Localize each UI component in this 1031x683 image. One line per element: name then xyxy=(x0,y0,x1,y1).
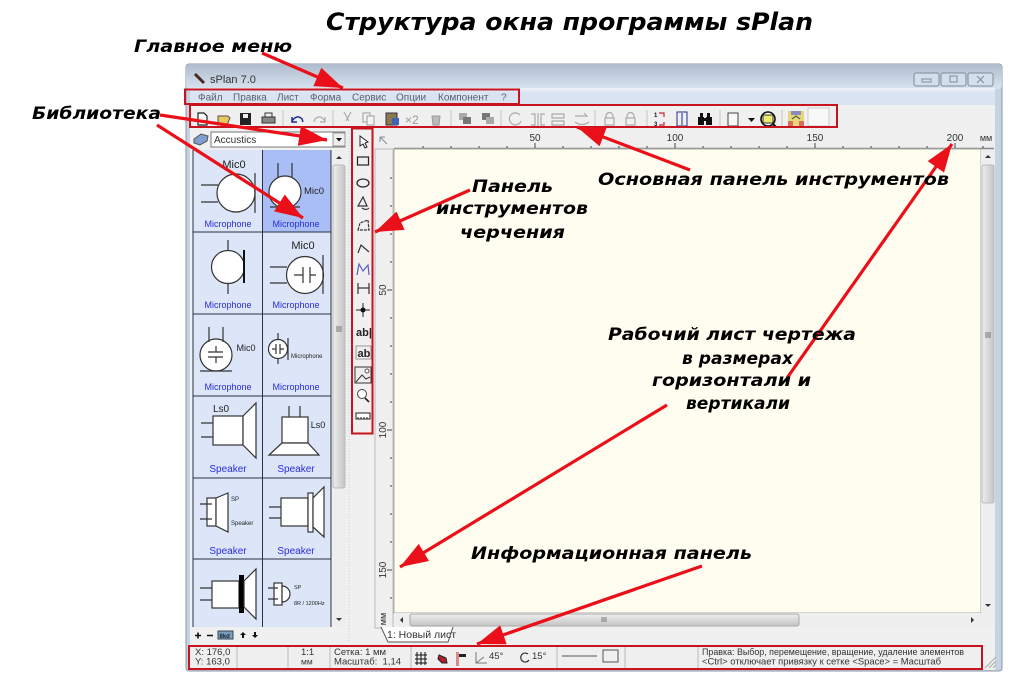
status bar: <Ctrl> отключает привязку к сетке <Space> = Масштаб xyxy=(702,656,942,668)
label: worksheet xyxy=(608,325,856,414)
status bar: Правка: Выбор, перемещение, вращение, удаление элементов xyxy=(702,647,964,658)
label: library: Библиотека xyxy=(32,104,161,124)
highlight box: menu xyxy=(185,90,519,104)
panel: drawing tools xyxy=(355,136,372,419)
icon: zoom page xyxy=(761,112,776,127)
icon: app pencil xyxy=(195,74,204,83)
menu bar: Сервис xyxy=(352,92,386,104)
icon: snap xyxy=(438,655,447,663)
tool: polyline xyxy=(358,245,369,253)
icon: page xyxy=(728,113,738,126)
tool: pointer xyxy=(360,136,368,148)
label: worksheet: Рабочий лист чертежа xyxy=(608,325,856,345)
cell: speaker 2: Speaker xyxy=(277,464,315,475)
top ruler xyxy=(375,130,995,149)
arrow: status bar xyxy=(477,566,702,644)
icon: copy xyxy=(363,113,374,125)
library bottom controls xyxy=(195,631,258,640)
label: worksheet: горизонтали и xyxy=(652,371,811,391)
tool: rectangle xyxy=(358,157,368,165)
arrow: vertical ruler xyxy=(400,405,667,567)
label: main toolbar: Основная панель инструментов xyxy=(598,170,949,190)
icon: save xyxy=(240,113,251,125)
label: drawing tools: черчения xyxy=(460,223,565,243)
cell: microphone 1: Mic0 xyxy=(222,159,246,171)
cell: speaker 6: SP xyxy=(294,585,302,591)
icon: library book xyxy=(194,134,208,145)
main toolbar xyxy=(190,105,995,129)
cell: speaker 4: Speaker xyxy=(277,546,315,557)
tool: text: ab| xyxy=(356,327,372,339)
menu bar: ? xyxy=(501,92,507,104)
horizontal scrollbar xyxy=(394,613,995,627)
line and shape style xyxy=(562,650,618,662)
cell: microphone 6: Microphone xyxy=(272,382,320,392)
left ruler: 50 xyxy=(378,284,389,296)
cell: speaker 1: Ls0 xyxy=(213,404,229,415)
library scrollbar xyxy=(333,150,346,627)
highlight box: main toolbar xyxy=(190,105,837,127)
menu bar: Опции xyxy=(396,92,426,104)
cell: speaker 4 xyxy=(269,487,324,557)
menu bar: Форма xyxy=(310,92,342,104)
menu bar: Правка xyxy=(233,92,267,104)
icon: numbering: 1 xyxy=(654,113,658,119)
white box xyxy=(808,108,829,126)
application window xyxy=(186,64,1002,671)
cell: speaker 3: SP xyxy=(231,497,239,503)
icon: print xyxy=(262,113,275,123)
status bar: X: 176,0 xyxy=(195,647,230,658)
cell: microphone 6 xyxy=(268,333,323,392)
window buttons xyxy=(914,73,993,86)
title: Структура окна программы sPlan xyxy=(326,8,813,36)
top ruler: 150 xyxy=(807,133,824,144)
status bar: Масштаб: 1,14 xyxy=(334,656,401,668)
status bar xyxy=(190,646,996,669)
tool: fill xyxy=(358,197,369,210)
left ruler: мм xyxy=(378,613,388,625)
cell: microphone 2: Microphone xyxy=(272,219,320,229)
status bar: 45° xyxy=(489,651,504,662)
menu bar: Компонент xyxy=(438,92,489,104)
arrow: library selector xyxy=(160,115,327,140)
cell: speaker 1 xyxy=(201,403,256,475)
cell: microphone 3 xyxy=(204,240,252,310)
icons: rotate and flip xyxy=(509,113,589,126)
label: main menu: Главное меню xyxy=(134,37,292,57)
cell: speaker 5 xyxy=(200,569,256,619)
library selector xyxy=(211,132,345,147)
tool: polygon xyxy=(358,220,369,230)
tool: ellipse xyxy=(357,179,369,187)
top ruler: мм xyxy=(980,133,992,143)
tool: text box: ab xyxy=(358,348,371,360)
highlight box: drawing tools xyxy=(352,128,372,434)
icon: dropdown xyxy=(748,118,755,122)
icon: resize grip xyxy=(985,657,996,668)
icon: paste xyxy=(386,113,399,125)
icons: layer order xyxy=(459,113,494,124)
label: drawing tools xyxy=(436,177,588,243)
arrow: main toolbar xyxy=(577,127,690,170)
sheet tab: 1: Новый лист xyxy=(387,629,456,641)
top ruler: 100 xyxy=(667,133,684,144)
cell: speaker 3 xyxy=(200,493,253,557)
cell: speaker 1: Speaker xyxy=(209,464,247,475)
icon: undo xyxy=(292,117,303,122)
icon: numbering: 3 xyxy=(654,122,658,128)
cell: speaker 2 xyxy=(269,406,325,475)
label: drawing tools: Панель xyxy=(472,177,553,197)
window title: sPlan 7.0 xyxy=(210,74,256,86)
arrow: main menu xyxy=(262,53,343,88)
top ruler: 200 xyxy=(947,133,964,144)
icon: cut xyxy=(344,112,351,121)
cell: microphone 4 xyxy=(270,240,324,310)
icon: trash xyxy=(432,116,440,125)
menu bar: Файл xyxy=(198,92,223,104)
library grid xyxy=(193,150,331,627)
panel: component library xyxy=(193,132,346,640)
menu bar xyxy=(190,88,995,105)
arrow: library grid xyxy=(157,125,303,218)
menu bar: Лист xyxy=(277,92,299,104)
icon: rotate step xyxy=(521,653,529,662)
left ruler: 100 xyxy=(378,421,389,438)
cell: microphone 3: Microphone xyxy=(204,300,252,310)
icon: redo xyxy=(314,117,325,122)
arrow: drawing tools xyxy=(375,190,470,232)
highlight box: status bar xyxy=(189,646,982,669)
icons: locks xyxy=(605,113,635,125)
cell: speaker 3: Speaker xyxy=(209,546,247,557)
cell: microphone 5: Mic0 xyxy=(236,343,256,353)
top ruler: 50 xyxy=(529,133,541,144)
icon: new xyxy=(198,113,207,125)
tool: node xyxy=(356,303,370,317)
worksheet xyxy=(394,149,981,613)
library selector: Accustics xyxy=(214,135,256,146)
cell: microphone 1: Microphone xyxy=(204,219,252,229)
cell: speaker 3: Speaker xyxy=(231,521,253,527)
label: worksheet: вертикали xyxy=(686,394,790,414)
tool: ruler xyxy=(356,413,370,419)
label: worksheet: в размерах xyxy=(682,349,794,369)
cell: microphone 5: Microphone xyxy=(204,382,252,392)
vertical scrollbar xyxy=(981,150,995,613)
label: drawing tools: инструментов xyxy=(436,199,588,219)
icon: angle xyxy=(476,652,487,663)
multiply two: ×2 xyxy=(405,113,419,127)
tool: bezier xyxy=(357,264,369,275)
tool: image xyxy=(355,367,371,383)
left ruler: 150 xyxy=(378,561,389,578)
cell: microphone 4: Microphone xyxy=(272,300,320,310)
tool: dimension xyxy=(358,283,369,294)
status bar: Сетка: 1 мм xyxy=(334,647,386,658)
icon: marker xyxy=(456,652,466,666)
label: info panel: Информационная панель xyxy=(471,544,752,564)
tool: zoom xyxy=(358,390,369,402)
cell: microphone 5 xyxy=(200,327,256,392)
cell: microphone 1 xyxy=(201,159,255,229)
status bar: мм xyxy=(301,656,313,666)
icon: numbering xyxy=(654,113,664,128)
left ruler xyxy=(375,149,393,628)
status bar: Y: 163,0 xyxy=(195,656,230,668)
cell: speaker 6 xyxy=(268,583,325,607)
cell: microphone 2: Mic0 xyxy=(304,186,324,197)
icon: open xyxy=(218,116,230,125)
arrow: horizontal ruler xyxy=(787,144,952,378)
cell: microphone 2 xyxy=(269,163,324,229)
icon: grid xyxy=(415,652,427,665)
status bar: 1:1 xyxy=(301,647,314,658)
cell: speaker 6: 8R / 1200Hz xyxy=(294,601,325,607)
icon: list xyxy=(677,112,687,126)
library bottom controls: 8kd xyxy=(220,634,230,640)
icon: colour block xyxy=(788,111,804,126)
cell: microphone 4: Mic0 xyxy=(291,240,315,252)
cell: microphone 6: Microphone xyxy=(291,354,323,360)
cell: speaker 2: Ls0 xyxy=(311,420,325,430)
icon: binoculars xyxy=(698,113,712,125)
status bar: 15° xyxy=(532,651,547,662)
